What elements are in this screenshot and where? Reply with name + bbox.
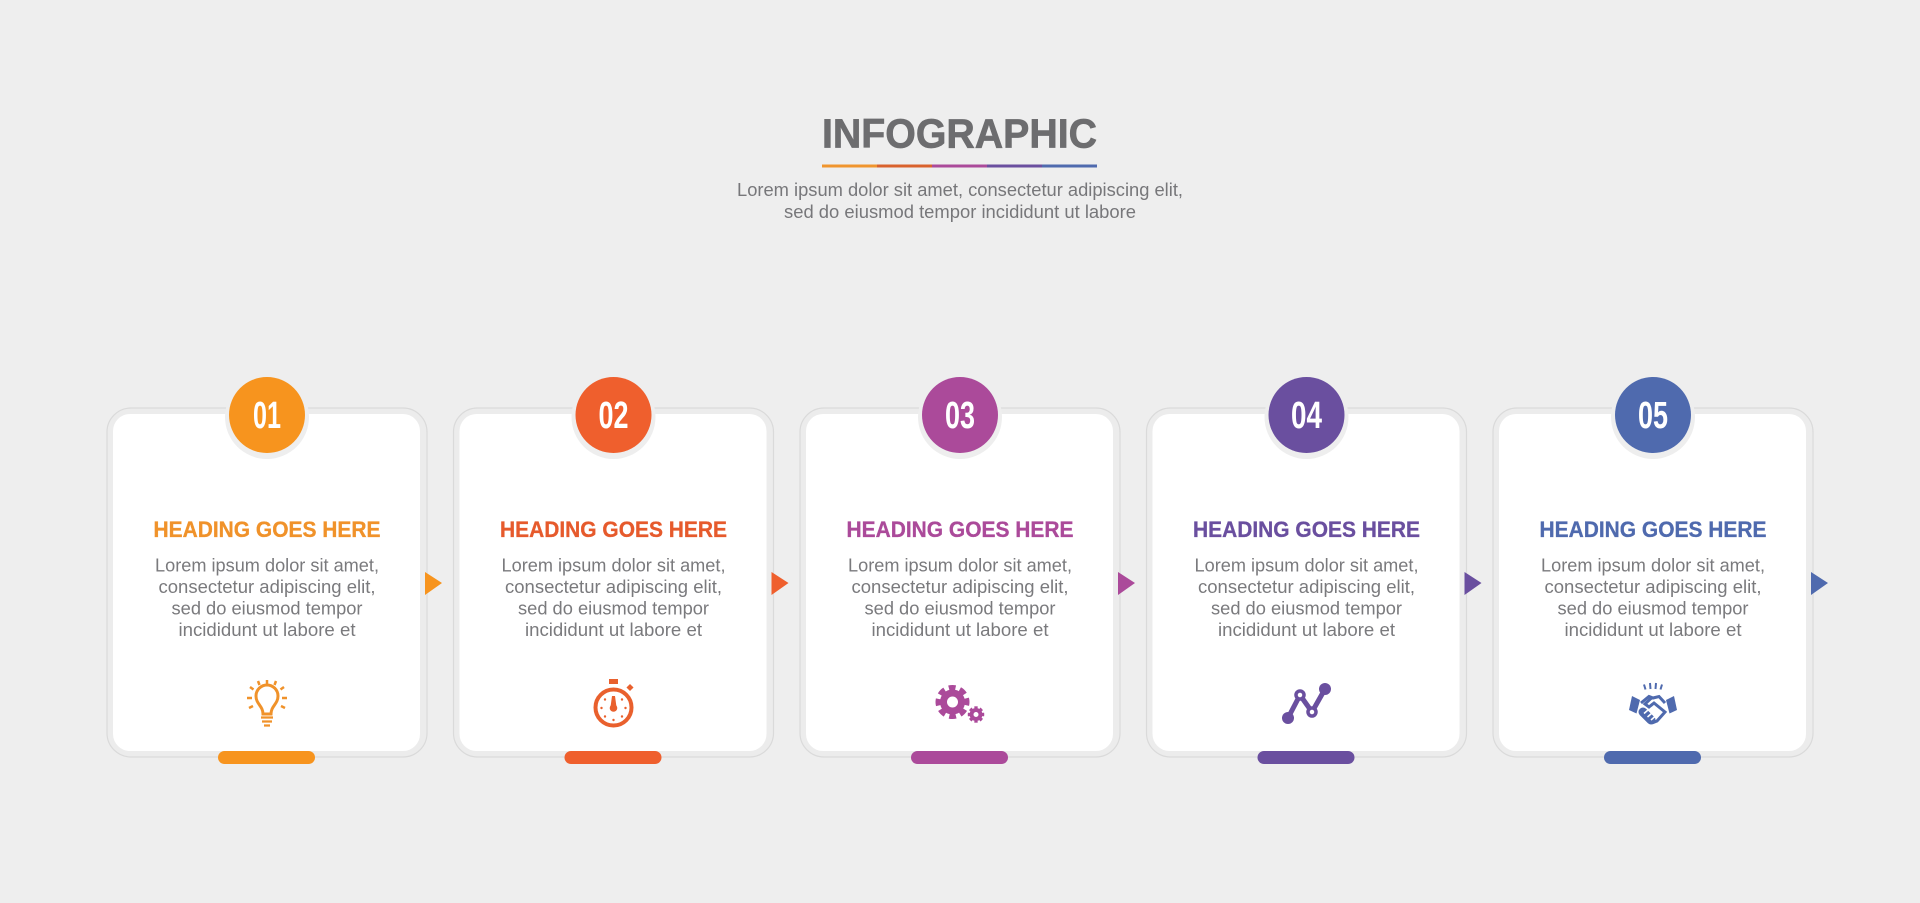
panel: step 04 xyxy=(1146,375,1482,764)
icon: line chart xyxy=(1282,683,1331,724)
number badge 02: 02 xyxy=(598,395,628,437)
card frame xyxy=(1146,408,1466,757)
body text: incididunt ut labore et xyxy=(871,620,1049,640)
number badge 01 xyxy=(225,375,309,459)
card frame xyxy=(1493,408,1813,757)
body text: Lorem ipsum dolor sit amet, xyxy=(1541,556,1765,576)
arrow xyxy=(772,572,788,595)
accent bar xyxy=(218,751,315,764)
body text xyxy=(1194,556,1418,640)
arrow xyxy=(425,572,442,595)
subtitle xyxy=(737,179,1183,222)
number badge 04: 04 xyxy=(1291,395,1322,437)
accent bar xyxy=(1604,751,1701,764)
arrow xyxy=(1464,572,1482,595)
body text: sed do eiusmod tempor xyxy=(865,598,1055,618)
heading: HEADING GOES HERE xyxy=(1540,517,1766,542)
body text xyxy=(1541,556,1765,640)
panel: step 02 xyxy=(454,375,788,764)
card frame xyxy=(107,408,427,757)
number badge 03: 03 xyxy=(945,395,975,437)
number badge 03 xyxy=(918,375,1002,459)
subtitle: sed do eiusmod tempor incididunt ut labore xyxy=(784,201,1136,222)
card frame xyxy=(800,408,1120,757)
heading: HEADING GOES HERE xyxy=(1193,517,1420,542)
body text xyxy=(155,556,379,640)
body text: sed do eiusmod tempor xyxy=(1211,598,1402,618)
body text: incididunt ut labore et xyxy=(525,620,702,640)
body text: consectetur adipiscing elit, xyxy=(1544,577,1762,597)
accent bar xyxy=(1258,751,1354,764)
body text: sed do eiusmod tempor xyxy=(518,598,709,618)
body text xyxy=(848,556,1072,640)
heading: HEADING GOES HERE xyxy=(154,517,380,542)
heading: HEADING GOES HERE xyxy=(500,517,727,542)
body text xyxy=(502,556,726,640)
body text: Lorem ipsum dolor sit amet, xyxy=(848,556,1072,576)
panel: step 01 xyxy=(107,375,442,764)
body text: incididunt ut labore et xyxy=(178,620,356,640)
body text: Lorem ipsum dolor sit amet, xyxy=(1194,556,1418,576)
accent bar xyxy=(564,751,662,764)
arrow xyxy=(1118,572,1135,595)
subtitle: Lorem ipsum dolor sit amet, consectetur adipiscing elit, xyxy=(737,179,1183,200)
icon: gears xyxy=(938,688,983,722)
number badge 02 xyxy=(572,375,656,459)
body text: Lorem ipsum dolor sit amet, xyxy=(502,556,726,576)
number badge 01: 01 xyxy=(253,395,281,437)
body text: consectetur adipiscing elit, xyxy=(505,577,722,597)
icon: handshake xyxy=(1629,683,1677,723)
panel: step 03 xyxy=(800,375,1135,764)
accent bar xyxy=(911,751,1008,764)
body text: Lorem ipsum dolor sit amet, xyxy=(155,556,379,576)
number badge 04 xyxy=(1264,375,1348,459)
gradient underline xyxy=(822,164,1097,168)
title: INFOGRAPHIC xyxy=(822,110,1097,156)
icon: light bulb xyxy=(247,680,287,726)
body text: sed do eiusmod tempor xyxy=(1558,598,1748,618)
panel: step 05 xyxy=(1493,375,1828,764)
card frame xyxy=(454,408,774,757)
body text: consectetur adipiscing elit, xyxy=(852,577,1068,597)
icon: stopwatch xyxy=(596,679,634,726)
body text: consectetur adipiscing elit, xyxy=(158,577,376,597)
heading: HEADING GOES HERE xyxy=(846,517,1074,542)
body text: incididunt ut labore et xyxy=(1218,620,1395,640)
body text: sed do eiusmod tempor xyxy=(172,598,362,618)
title block xyxy=(737,110,1183,222)
body text: consectetur adipiscing elit, xyxy=(1198,577,1415,597)
number badge 05: 05 xyxy=(1638,395,1668,437)
arrow xyxy=(1811,572,1828,595)
number badge 05 xyxy=(1611,375,1695,459)
body text: incididunt ut labore et xyxy=(1564,620,1742,640)
